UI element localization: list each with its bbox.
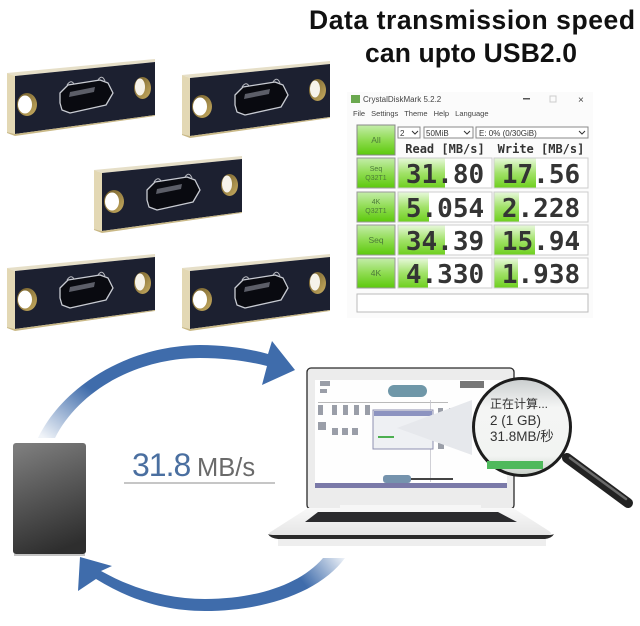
speed label bbox=[124, 447, 275, 483]
lens text bbox=[490, 396, 554, 444]
all button bbox=[357, 125, 395, 155]
row: Seq Q32T1 bbox=[357, 158, 588, 190]
handle bbox=[567, 458, 628, 503]
comment box bbox=[357, 294, 588, 312]
lens bbox=[474, 378, 570, 476]
column headers bbox=[405, 142, 584, 156]
dropdowns: 50MiB bbox=[426, 129, 449, 138]
icon: magnifying glass bbox=[474, 378, 628, 503]
title: can upto USB2.0 bbox=[365, 38, 577, 68]
laptop base bbox=[269, 508, 551, 535]
all button: All bbox=[371, 135, 381, 145]
progress bar bbox=[487, 461, 543, 469]
dropdowns: E: 0% (0/30GiB) bbox=[479, 129, 537, 138]
keyboard bbox=[305, 512, 517, 522]
laptop screen bbox=[315, 380, 507, 488]
dropdowns: 2 bbox=[400, 129, 405, 138]
row: 4K: 4K bbox=[371, 268, 382, 278]
window title bar: CrystalDiskMark 5.2.2 bbox=[363, 95, 442, 104]
arrow: laptop to drive bbox=[78, 557, 345, 611]
module: bottom right bbox=[182, 254, 330, 331]
module: top right bbox=[182, 61, 330, 138]
module: top left bbox=[7, 59, 155, 136]
row: 4K: 4.330 bbox=[406, 260, 484, 290]
row: 4K Q32T1: 5.054 bbox=[406, 194, 484, 224]
column headers: Read [MB/s] bbox=[405, 142, 485, 156]
laptop lid bbox=[307, 368, 514, 509]
lens text: 2 (1 GB) bbox=[490, 413, 541, 428]
row: Seq Q32T1: Seq bbox=[370, 166, 382, 173]
row: 4K Q32T1 bbox=[357, 192, 588, 224]
speed label: MB/s bbox=[197, 454, 255, 482]
icon: laptop bbox=[268, 368, 554, 546]
row: 4K bbox=[357, 258, 588, 290]
row: 4K: 1.938 bbox=[502, 260, 580, 290]
row: Seq Q32T1: 17.56 bbox=[502, 160, 580, 190]
speed label: 31.8 bbox=[132, 447, 190, 483]
window title bar bbox=[351, 95, 584, 106]
hinge bbox=[340, 505, 481, 510]
icon: external hard drive bbox=[13, 443, 86, 556]
window title bar: × bbox=[578, 95, 584, 106]
row: 4K Q32T1: 4K bbox=[372, 199, 381, 206]
shadow bbox=[278, 539, 546, 546]
title bbox=[309, 5, 635, 68]
module: middle bbox=[94, 156, 242, 233]
row: Seq: 15.94 bbox=[502, 227, 580, 257]
row: Seq Q32T1: 31.80 bbox=[406, 160, 484, 190]
panel: CrystalDiskMark window bbox=[347, 92, 593, 318]
row: Seq Q32T1: Q32T1 bbox=[365, 175, 387, 182]
lens text: 正在计算... bbox=[490, 396, 548, 411]
row: 4K Q32T1: Q32T1 bbox=[365, 208, 387, 215]
front edge bbox=[268, 534, 554, 539]
module: bottom left bbox=[7, 254, 155, 331]
title: Data transmission speed bbox=[309, 5, 635, 35]
lens text: 31.8MB/秒 bbox=[490, 429, 554, 444]
column headers: Write [MB/s] bbox=[498, 142, 584, 156]
row: Seq: Seq bbox=[368, 235, 384, 245]
dropdowns bbox=[398, 127, 588, 138]
arrow: drive to laptop bbox=[38, 341, 295, 438]
row: Seq: 34.39 bbox=[406, 227, 484, 257]
menu bar: File Settings Theme Help Language bbox=[353, 109, 489, 118]
row: Seq bbox=[357, 225, 588, 257]
row: 4K Q32T1: 2.228 bbox=[502, 194, 580, 224]
